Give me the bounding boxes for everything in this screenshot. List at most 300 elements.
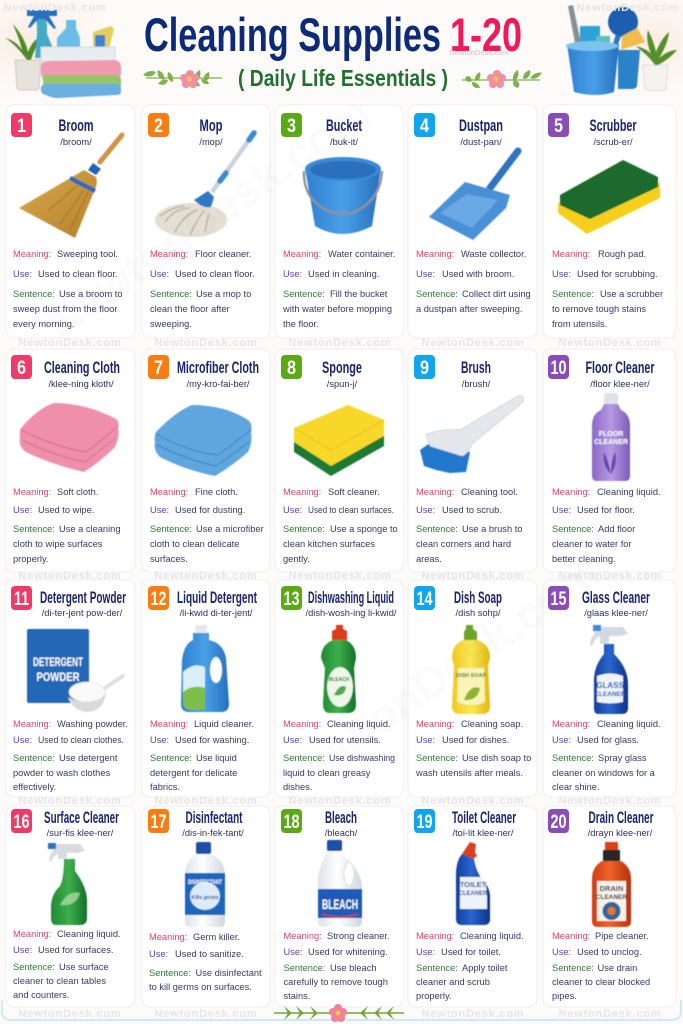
- header illustration: bucket with mop and plant: [566, 5, 677, 95]
- sentence: Use a cleaning: [59, 524, 121, 534]
- floral ornament right: [462, 70, 542, 88]
- meaning: Meaning:: [552, 487, 590, 497]
- title: Bleach: [325, 809, 357, 827]
- sentence: Sentence:: [283, 753, 325, 763]
- badge 9: [414, 355, 435, 379]
- pronunciation: /dust-pan/: [460, 137, 502, 147]
- sentence: Sentence:: [552, 524, 594, 534]
- badge 10: 10: [550, 358, 566, 379]
- card 16: Surface Cleaner: [6, 806, 135, 1007]
- icon: sponge: [294, 405, 384, 476]
- sentence: from utensils.: [552, 319, 607, 329]
- sentence: sweep dust from the floor: [13, 304, 117, 314]
- top corner watermarks: [4, 2, 679, 14]
- badge 8: [281, 355, 302, 379]
- pronunciation: /di-ter-jent pow-der/: [42, 608, 123, 618]
- meaning: Pipe cleaner.: [595, 931, 649, 941]
- meaning: Water container.: [328, 249, 395, 259]
- use: Use:: [552, 947, 571, 957]
- icon: bleach bottle: [318, 840, 362, 927]
- card 9: Brush: [408, 349, 537, 572]
- sentence: Use a microfiber: [196, 524, 264, 534]
- use: Use:: [283, 269, 302, 279]
- badge 20: [548, 809, 569, 833]
- header illustration: cleaning bottles, plant and towels: [5, 10, 121, 98]
- subtitle: ( Daily Life Essentials ): [238, 65, 448, 91]
- title: Toilet Cleaner: [452, 809, 516, 827]
- meaning: Meaning:: [13, 929, 51, 939]
- icon: dishwashing bottle: BLEACH: [329, 677, 350, 683]
- use: Use:: [552, 269, 571, 279]
- use: Use:: [13, 269, 32, 279]
- icon: toilet cleaner bottle: [456, 842, 490, 925]
- use: Used for scrubbing.: [577, 269, 658, 279]
- use: Use:: [416, 269, 435, 279]
- sentence: Use a broom to: [59, 289, 123, 299]
- use: Use:: [149, 949, 168, 959]
- sentence: carefully to remove tough: [284, 977, 388, 987]
- meaning: Germ killer.: [193, 932, 240, 942]
- card 15: Glass Cleaner: [543, 580, 676, 797]
- bottom floral ornament: [274, 1004, 404, 1022]
- title: Scrubber: [590, 117, 637, 135]
- badge 9: 9: [420, 358, 429, 379]
- badge 19: 19: [416, 812, 432, 833]
- pronunciation: /broom/: [60, 137, 92, 147]
- badge 14: [414, 586, 435, 610]
- badge 15: 15: [550, 589, 567, 610]
- meaning: Cleaning liquid.: [597, 487, 661, 497]
- sentence: Sentence:: [150, 753, 192, 763]
- sentence: pipes.: [552, 991, 577, 1001]
- meaning: Meaning:: [552, 249, 590, 259]
- watermark strips between rows: NewtonDesk.com: [19, 1008, 121, 1020]
- sentence: Use liquid: [196, 753, 237, 763]
- icon: toilet cleaner bottle: TOILET: [460, 880, 487, 889]
- pronunciation: /mop/: [199, 137, 223, 147]
- card 14: Dish Soap: [408, 580, 537, 797]
- meaning: Fine cloth.: [195, 487, 238, 497]
- title: Surface Cleaner: [44, 809, 119, 827]
- use: Used to clean surfaces.: [308, 505, 394, 515]
- use: Used for toilet.: [441, 947, 501, 957]
- title: Dustpan: [459, 117, 503, 135]
- badge 16: 16: [14, 812, 30, 833]
- card 13: Dishwashing Liquid: [275, 580, 403, 797]
- icon: glass cleaner spray: GLASS: [596, 681, 624, 690]
- sentence: clean kitchen surfaces: [283, 539, 375, 549]
- meaning: Floor cleaner.: [195, 249, 251, 259]
- sentence: Sentence:: [416, 963, 458, 973]
- icon: surface cleaner spray: [48, 843, 87, 925]
- sentence: cloth to clean delicate: [150, 539, 239, 549]
- icon: scrubber: [558, 160, 660, 234]
- sentence: cleaner to water for: [552, 539, 632, 549]
- watermark strips between rows: NewtonDesk.com: [422, 570, 524, 582]
- use: Used for glass.: [577, 735, 639, 745]
- card 17: Disinfectant: [142, 806, 270, 1007]
- use: Use:: [416, 735, 435, 745]
- meaning: Sweeping tool.: [57, 249, 118, 259]
- meaning: Cleaning liquid.: [327, 719, 391, 729]
- sentence: Fill the bucket: [330, 289, 388, 299]
- meaning: Cleaning liquid.: [597, 719, 661, 729]
- pronunciation: /sur-fis klee-ner/: [47, 828, 114, 838]
- pronunciation: /floor klee-ner/: [590, 379, 650, 389]
- use: Use:: [150, 735, 169, 745]
- icon: broom: [19, 135, 122, 238]
- sentence: fabrics.: [150, 782, 180, 792]
- title: Microfiber Cloth: [177, 359, 259, 377]
- use: Used to clean floor.: [38, 269, 118, 279]
- pronunciation: /klee-ning kloth/: [48, 379, 114, 389]
- use: Use:: [13, 945, 32, 955]
- icon: glass cleaner spray: [590, 625, 628, 714]
- pronunciation: /buk-it/: [330, 137, 358, 147]
- sentence: cleaner to clean tables: [13, 976, 106, 986]
- pronunciation: /dish sohp/: [456, 608, 501, 618]
- card 1: Broom: [6, 105, 135, 338]
- watermark strips between rows: NewtonDesk.com: [155, 795, 257, 807]
- sentence: Sentence:: [284, 963, 325, 973]
- use: Use:: [13, 505, 32, 515]
- use: Used to sanitize.: [175, 949, 244, 959]
- sentence: Sentence:: [416, 524, 458, 534]
- sentence: Use surface: [59, 962, 109, 972]
- sentence: clean the floor after: [150, 304, 230, 314]
- watermark strips between rows: NewtonDesk.com: [19, 337, 121, 349]
- badge 6: [11, 355, 32, 379]
- use: Used for utensils.: [309, 735, 381, 745]
- badge 16: [11, 809, 32, 833]
- use: Used for whitening.: [308, 947, 388, 957]
- badge 13: [281, 586, 302, 610]
- badge 1: 1: [17, 116, 26, 137]
- use: Used to scrub.: [442, 505, 502, 515]
- watermark strips between rows: NewtonDesk.com: [155, 1008, 257, 1020]
- use: Use:: [552, 505, 571, 515]
- sentence: Add floor: [598, 524, 635, 534]
- use: Used to unclog.: [577, 947, 642, 957]
- sentence: stains.: [284, 991, 310, 1001]
- sentence: gently.: [283, 554, 310, 564]
- watermark strips between rows: NewtonDesk.com: [289, 337, 391, 349]
- icon: drain cleaner bottle: DRAIN: [600, 884, 623, 893]
- large faint diagonal watermark: NewtonDesk.com: [36, 86, 380, 348]
- sentence: Use disinfectant: [196, 968, 262, 978]
- sentence: Sentence:: [13, 753, 55, 763]
- badge 12: 12: [150, 589, 166, 610]
- sentence: Sentence:: [283, 289, 325, 299]
- use: Used for washing.: [175, 735, 249, 745]
- badge 18: 18: [284, 812, 300, 833]
- meaning: Meaning:: [552, 719, 590, 729]
- watermark strips between rows: NewtonDesk.com: [19, 570, 121, 582]
- watermark strips between rows: NewtonDesk.com: [559, 337, 661, 349]
- sentence: Use a mop to: [196, 289, 251, 299]
- sentence: Sentence:: [552, 753, 594, 763]
- sentence: Sentence:: [149, 968, 191, 978]
- meaning: Cleaning tool.: [461, 487, 518, 497]
- pronunciation: /bleach/: [325, 828, 358, 838]
- sentence: better cleaning.: [552, 554, 616, 564]
- sentence: Spray glass: [598, 753, 647, 763]
- watermark strips between rows: NewtonDesk.com: [422, 1008, 524, 1020]
- badge 3: [281, 113, 302, 137]
- sentence: Collect dirt using: [462, 289, 531, 299]
- title: Cleaning Supplies: [144, 8, 441, 61]
- sentence: Sentence:: [283, 524, 325, 534]
- large faint diagonal watermark: NewtonDesk.com: [266, 546, 610, 808]
- icon: glass cleaner spray: CLEANER: [594, 691, 626, 698]
- meaning: Soft cleaner.: [328, 487, 380, 497]
- sentence: cleaner on windows for a: [552, 768, 656, 778]
- use: Used for surfaces.: [38, 945, 113, 955]
- use: Use:: [150, 505, 169, 515]
- badge 15: [548, 586, 569, 610]
- card 2: Mop: [142, 105, 270, 338]
- sentence: wash utensils after meals.: [415, 768, 523, 778]
- pronunciation: /spun-j/: [327, 379, 358, 389]
- watermark strips between rows: NewtonDesk.com: [19, 795, 121, 807]
- use: Used for dusting.: [175, 505, 245, 515]
- icon: disinfectant bottle: DISINFECTANT: [188, 880, 222, 886]
- icon: drain cleaner bottle: CLEANER: [596, 894, 628, 901]
- card 18: Bleach: [275, 806, 403, 1007]
- watermark strips between rows: NewtonDesk.com: [289, 570, 391, 582]
- sentence: cleaner to clear blocked: [552, 977, 650, 987]
- icon: disinfectant bottle: Kills germs: [192, 895, 219, 901]
- sentence: surfaces.: [150, 554, 188, 564]
- meaning: Meaning:: [283, 719, 321, 729]
- badge 4: [414, 113, 435, 137]
- meaning: Meaning:: [552, 931, 590, 941]
- top corner watermarks: NewtonDesk.com: [4, 2, 106, 14]
- sentence: sweeping.: [150, 319, 192, 329]
- pronunciation: /dis-in-fek-tant/: [182, 828, 244, 838]
- title: Dishwashing Liquid: [308, 589, 394, 607]
- card 20: Drain Cleaner: [543, 806, 676, 1007]
- badge 19: [414, 809, 435, 833]
- icon: drain cleaner bottle: [592, 842, 631, 927]
- card 3: Bucket: [275, 105, 403, 338]
- sentence: to kill germs on surfaces.: [149, 982, 252, 992]
- badge 8: 8: [287, 358, 296, 379]
- pronunciation: /drayn klee-ner/: [588, 828, 653, 838]
- badge 2: [148, 113, 169, 137]
- watermark strips between rows: NewtonDesk.com: [155, 337, 257, 349]
- sentence: Sentence:: [416, 289, 458, 299]
- meaning: Meaning:: [13, 249, 51, 259]
- card 11: Detergent Powder: [6, 580, 135, 797]
- title: Sponge: [322, 359, 362, 377]
- meaning: Soft cloth.: [57, 487, 98, 497]
- sentence: Sentence:: [552, 289, 594, 299]
- large faint diagonal watermark: [36, 86, 610, 808]
- use: Used with broom.: [442, 269, 514, 279]
- sentence: Use a sponge to: [330, 524, 398, 534]
- title: Brush: [461, 359, 491, 377]
- badge 14: 14: [416, 589, 433, 610]
- sentence: Use dishwashing: [329, 753, 395, 763]
- meaning: Meaning:: [283, 249, 321, 259]
- meaning: Meaning:: [284, 931, 322, 941]
- title: Broom: [58, 117, 94, 135]
- use: Used to wipe.: [38, 505, 94, 515]
- watermark strips between rows: NewtonDesk.com: [289, 795, 391, 807]
- sentence: Use bleach: [330, 963, 377, 973]
- sentence: Sentence:: [150, 289, 192, 299]
- sentence: properly.: [13, 554, 48, 564]
- icon: detergent box and scoop: POWDER: [36, 670, 80, 684]
- badge 10: [548, 355, 569, 379]
- badge 11: [11, 586, 32, 610]
- sentence: detergent for delicate: [150, 768, 237, 778]
- sentence: Apply toilet: [462, 963, 508, 973]
- meaning: Cleaning liquid.: [460, 931, 524, 941]
- sentence: and counters.: [13, 990, 69, 1000]
- badge 11: 11: [14, 589, 29, 610]
- card 8: Sponge: [275, 349, 403, 572]
- sentence: Sentence:: [13, 962, 55, 972]
- title: Bucket: [326, 117, 362, 135]
- use: Used in cleaning.: [308, 269, 379, 279]
- icon: blue cloth: [155, 405, 252, 476]
- icon: disinfectant bottle: [185, 842, 225, 927]
- title: Dish Soap: [454, 589, 502, 607]
- meaning: Meaning:: [150, 249, 188, 259]
- badge 1: [11, 113, 32, 137]
- sentence: liquid to clean greasy: [283, 768, 371, 778]
- watermark strips between rows: NewtonDesk.com: [422, 795, 524, 807]
- badge 18: [281, 809, 302, 833]
- badge 7: [148, 355, 169, 379]
- use: Use:: [416, 947, 435, 957]
- meaning: Rough pad.: [598, 249, 646, 259]
- sentence: cleaner and scrub: [416, 977, 490, 987]
- icon: dish soap bottle: DISH SOAP: [456, 673, 486, 679]
- card 12: Liquid Detergent: [142, 580, 270, 797]
- meaning: Meaning:: [416, 719, 454, 729]
- use: Used for floor.: [577, 505, 635, 515]
- card 6: Cleaning Cloth: [6, 349, 135, 572]
- meaning: Liquid cleaner.: [194, 719, 254, 729]
- title: Liquid Detergent: [177, 589, 257, 607]
- icon: dustpan: [429, 151, 518, 240]
- badge 17: 17: [150, 812, 166, 833]
- meaning: Meaning:: [283, 487, 321, 497]
- badge 20: 20: [550, 812, 566, 833]
- badge 12: [148, 586, 169, 610]
- watermark strips between rows: NewtonDesk.com: [559, 1008, 661, 1020]
- icon: floor cleaner bottle: CLEANER: [594, 439, 628, 446]
- pronunciation: /toi-lit klee-ner/: [453, 828, 514, 838]
- pronunciation: /brush/: [462, 379, 491, 389]
- title: Disinfectant: [186, 809, 243, 827]
- card 10: Floor Cleaner: [543, 349, 676, 572]
- use: Used to clean floor.: [175, 269, 255, 279]
- title: 1-20: [450, 8, 522, 61]
- sentence: Sentence:: [13, 289, 55, 299]
- use: Use:: [416, 505, 435, 515]
- sentence: the floor.: [283, 319, 319, 329]
- watermark strips between rows: NewtonDesk.com: [155, 570, 257, 582]
- badge 13: 13: [284, 589, 300, 610]
- use: Used for dishes.: [442, 735, 509, 745]
- sentence: with water before mopping: [282, 304, 392, 314]
- use: Use:: [13, 735, 32, 745]
- meaning: Meaning:: [149, 932, 187, 942]
- meaning: Meaning:: [150, 487, 188, 497]
- meaning: Strong cleaner.: [327, 931, 390, 941]
- card 19: Toilet Cleaner: [408, 806, 537, 1007]
- pronunciation: /my-kro-fai-ber/: [186, 379, 250, 389]
- meaning: Meaning:: [13, 719, 51, 729]
- sentence: properly.: [416, 991, 451, 1001]
- icon: dish soap bottle: [452, 625, 490, 714]
- meaning: Meaning:: [416, 487, 454, 497]
- badge 4: 4: [420, 116, 429, 137]
- pronunciation: /dish-wosh-ing li-kwid/: [306, 608, 397, 618]
- sentence: clear shine.: [552, 782, 600, 792]
- icon: floor cleaner bottle: FLOOR: [599, 431, 623, 438]
- card 7: Microfiber Cloth: [142, 349, 270, 572]
- sentence: effectively.: [13, 782, 56, 792]
- icon: detergent box and scoop: [27, 629, 123, 712]
- sentence: a dustpan after sweeping.: [416, 304, 522, 314]
- watermark strips between rows: NewtonDesk.com: [559, 570, 661, 582]
- sentence: Use detergent: [59, 753, 118, 763]
- title: Mop: [200, 117, 222, 135]
- sentence: powder to wash clothes: [13, 768, 111, 778]
- meaning: Cleaning soap.: [461, 719, 523, 729]
- meaning: Meaning:: [416, 931, 454, 941]
- sentence: clean corners and hard: [416, 539, 511, 549]
- pronunciation: /li-kwid di-ter-jent/: [180, 608, 253, 618]
- icon: floor cleaner bottle: [592, 393, 630, 481]
- meaning: Cleaning liquid.: [57, 929, 121, 939]
- sentence: Sentence:: [13, 524, 55, 534]
- pronunciation: /scrub-er/: [593, 137, 633, 147]
- badge 7: 7: [154, 358, 163, 379]
- badge 5: [548, 113, 569, 137]
- meaning: Meaning:: [150, 719, 188, 729]
- sentence: Use dish soap to: [462, 753, 531, 763]
- meaning: Meaning:: [13, 487, 51, 497]
- icon: liquid detergent bottle: [181, 625, 229, 712]
- use: Use:: [552, 735, 571, 745]
- icon: bleach bottle: BLEACH: [322, 896, 358, 912]
- card 4: Dustpan: [408, 105, 537, 338]
- watermark strips between rows: NewtonDesk.com: [559, 795, 661, 807]
- meaning: Meaning:: [416, 249, 454, 259]
- badge 5: 5: [554, 116, 563, 137]
- icon: dishwashing bottle: [321, 625, 356, 713]
- small watermark under title: NewtonDesk.com: [450, 48, 508, 57]
- title: Detergent Powder: [40, 589, 126, 607]
- title: Cleaning Cloth: [44, 359, 120, 377]
- icon: detergent box and scoop: DETERGENT: [33, 655, 83, 669]
- sentence: Use a brush to: [462, 524, 522, 534]
- sentence: Sentence:: [416, 753, 458, 763]
- badge 6: 6: [17, 358, 26, 379]
- top corner watermarks: NewtonDesk.com: [577, 2, 679, 14]
- badge 3: 3: [287, 116, 296, 137]
- icon: pink cloth: [20, 403, 119, 472]
- use: Use:: [283, 735, 302, 745]
- icon: toilet cleaner bottle: CLEANER: [458, 891, 488, 897]
- sentence: to remove tough stains: [552, 304, 646, 314]
